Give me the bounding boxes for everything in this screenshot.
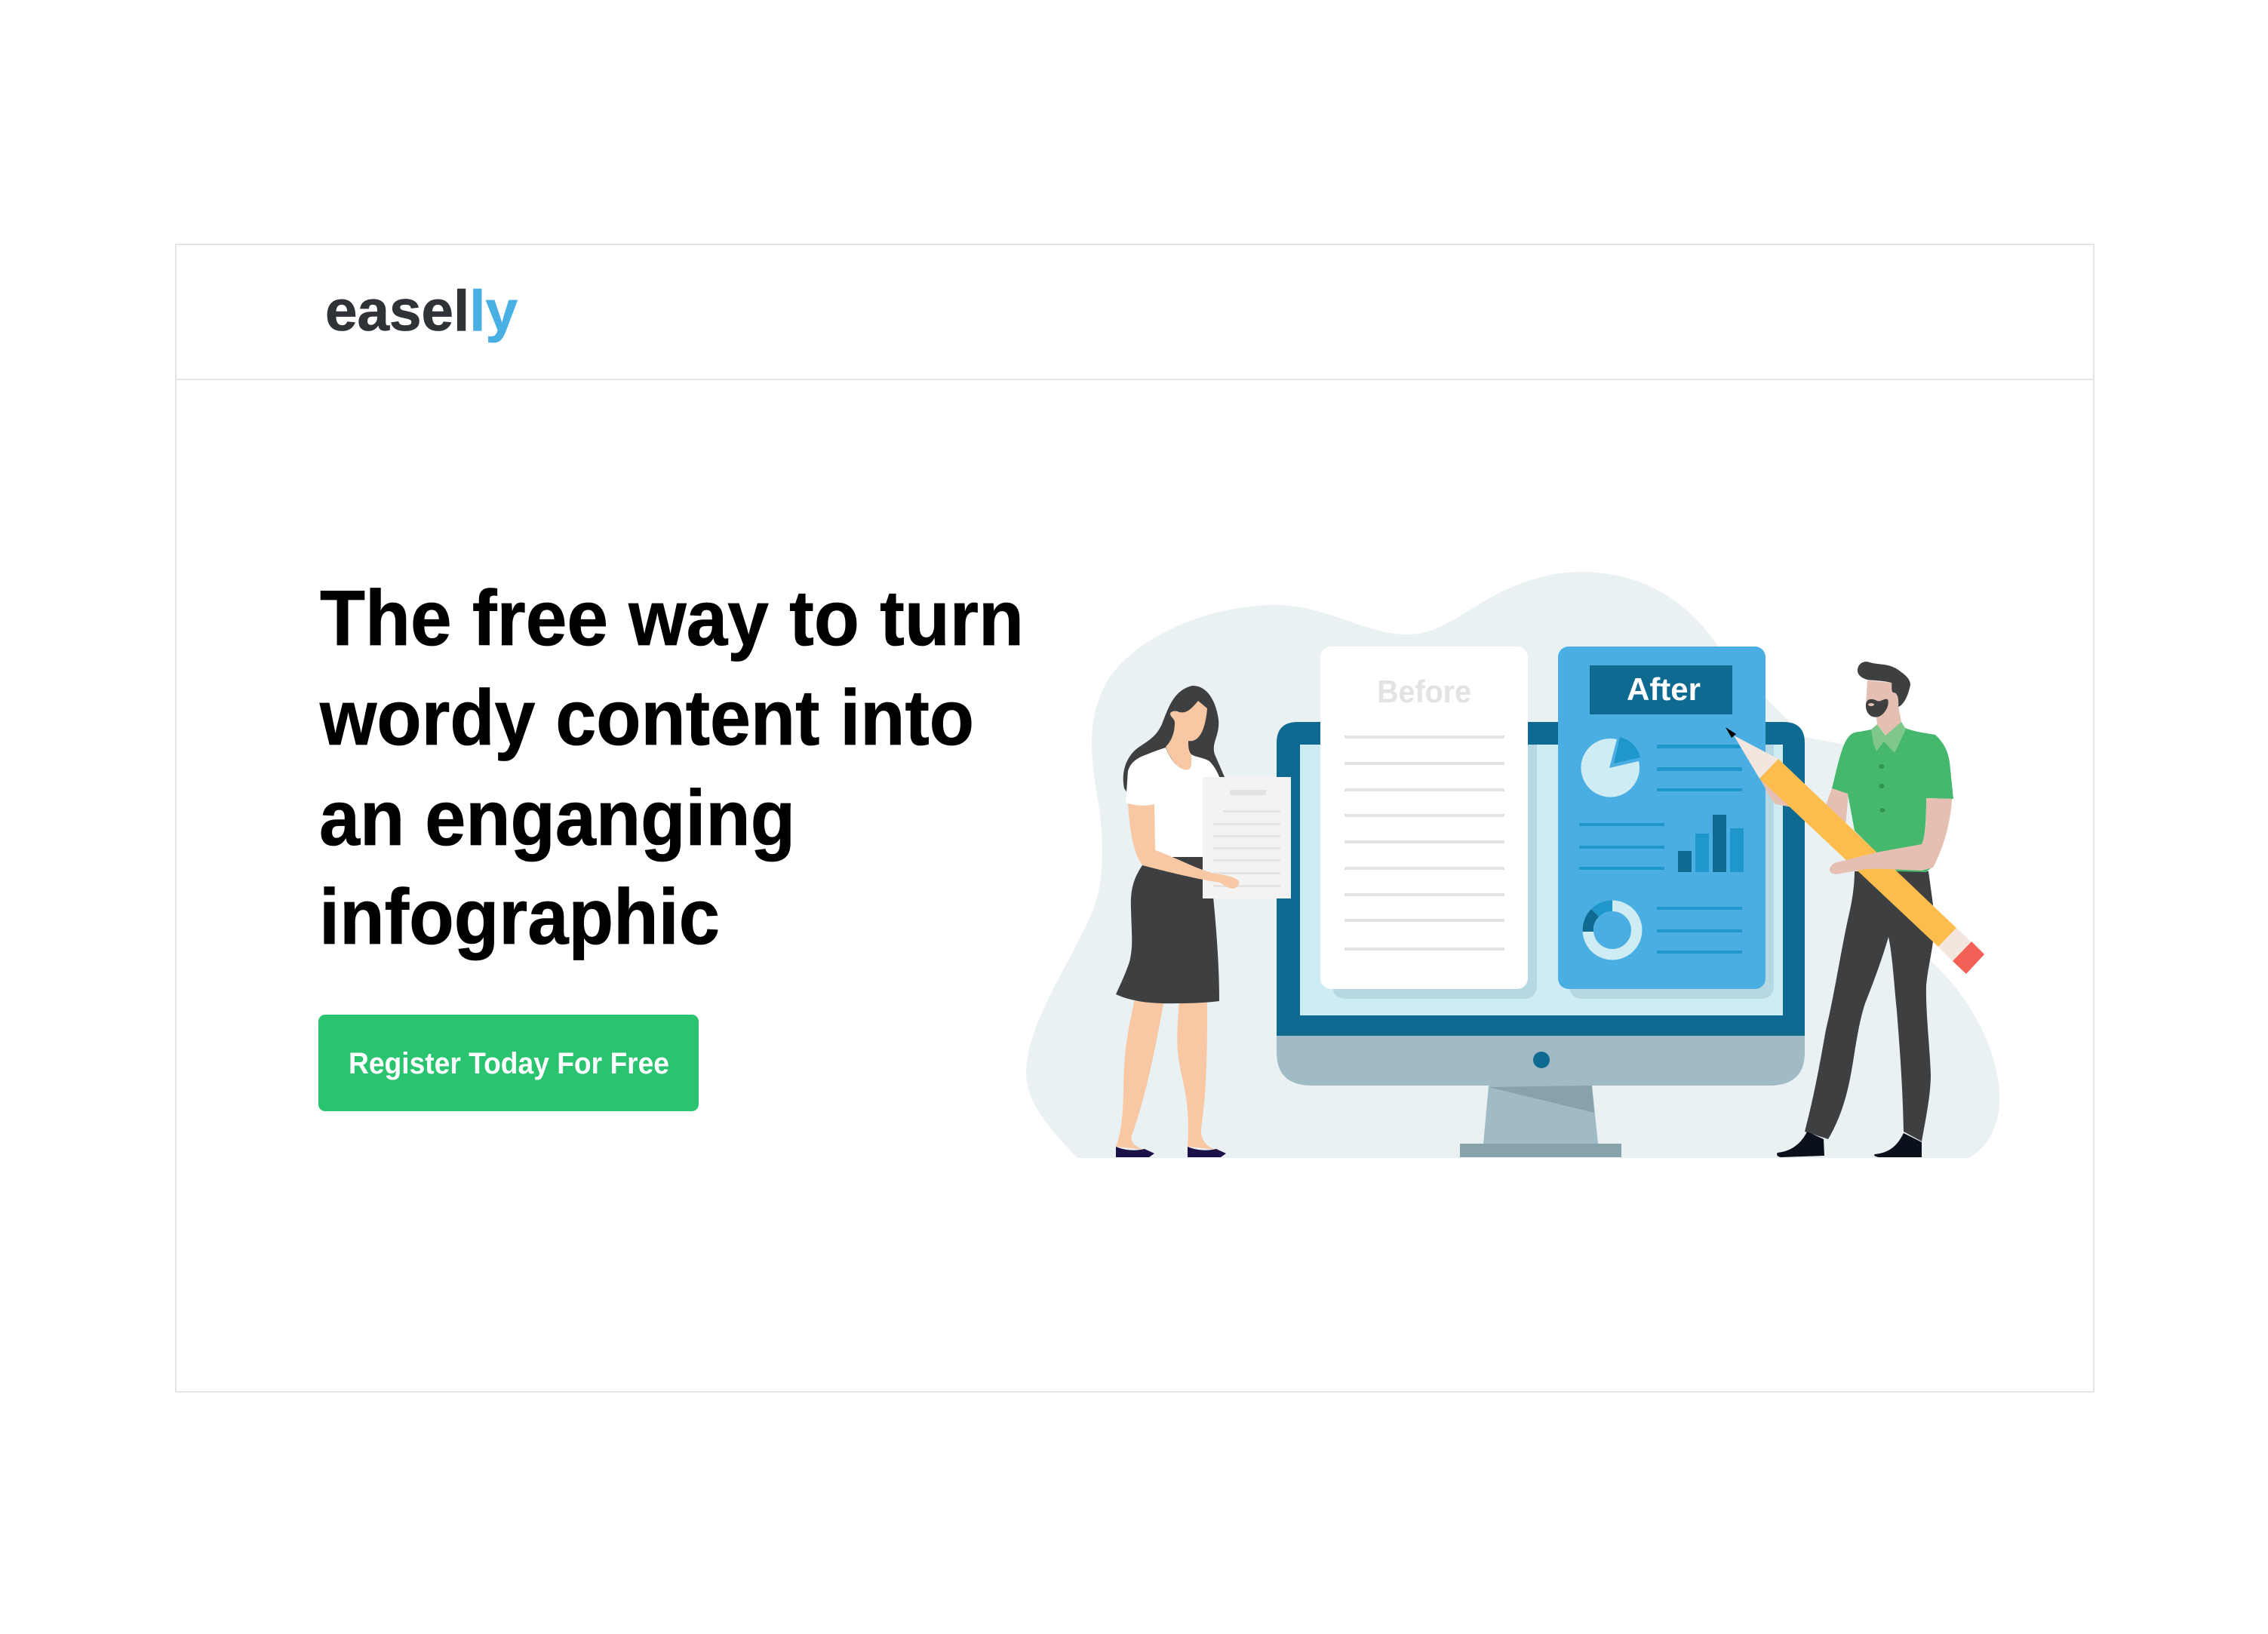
hair (1123, 686, 1225, 800)
monitor (1277, 722, 1805, 1157)
skirt (1116, 857, 1219, 1003)
arm (1128, 803, 1239, 889)
bar chart (1678, 815, 1744, 872)
front arm (1830, 798, 1952, 874)
neck and face (1866, 680, 1901, 736)
shoes (1777, 1132, 1824, 1157)
pants (1805, 871, 1933, 1141)
heading: an enganging (319, 775, 795, 862)
panel: after (1558, 647, 1766, 989)
card shadows (1332, 745, 1774, 999)
background blob (1026, 572, 1999, 1158)
legs (1116, 996, 1164, 1150)
pie chart (1581, 737, 1640, 797)
heading (319, 575, 1024, 961)
panel: before (1320, 647, 1528, 989)
text lines (1579, 745, 1742, 954)
illustration (1026, 572, 1999, 1158)
button: register: Register Today For Free (349, 1047, 669, 1080)
heading: The free way to turn (320, 575, 1024, 662)
mouth (1868, 703, 1874, 706)
heading: infographic (319, 874, 720, 961)
after label (1590, 665, 1732, 714)
beard (1866, 699, 1888, 717)
logo: easelly: easelly (325, 279, 518, 343)
heading: wordy content into (319, 674, 974, 762)
shirt (1832, 722, 1953, 872)
woman (1116, 686, 1291, 1157)
man (1726, 662, 1984, 1157)
after label: After (1627, 671, 1701, 707)
shirt (1126, 748, 1220, 857)
shoes (1116, 1147, 1154, 1157)
button: register (318, 1015, 699, 1111)
hair (1858, 662, 1910, 707)
pencil (1726, 727, 1984, 974)
face and neck (1166, 701, 1207, 769)
paper (1203, 777, 1291, 898)
panel: before: Before (1377, 674, 1471, 709)
donut chart (1583, 900, 1636, 954)
buttons (1879, 764, 1885, 812)
collar (1871, 722, 1906, 753)
panel: outer card frame (176, 244, 2094, 1392)
back arm (1760, 779, 1849, 839)
